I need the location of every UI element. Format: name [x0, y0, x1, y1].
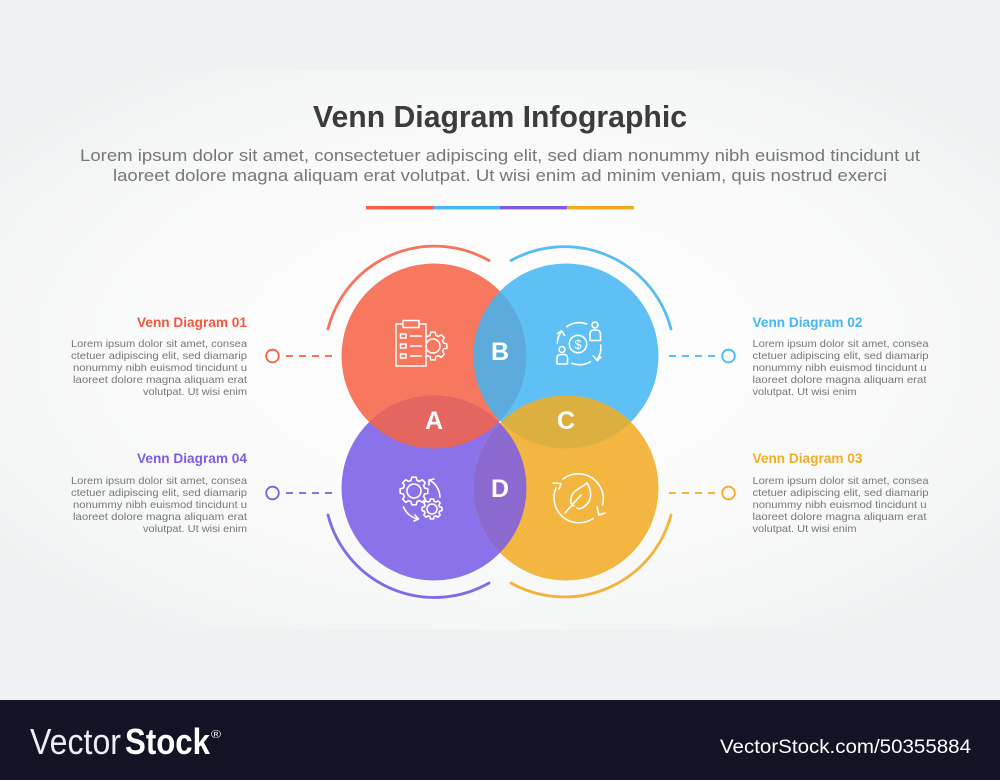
icon: gears with arrows: [400, 477, 442, 521]
text block: Venn Diagram 02: ctetuer adipiscing elit, sed diamarip: [752, 351, 929, 362]
letter C: C: [557, 407, 575, 435]
overlap A: [369, 396, 499, 448]
circle 01 red: [342, 264, 526, 448]
text block: Venn Diagram 03: Lorem ipsum dolor sit amet, consea: [752, 476, 929, 487]
overlap B: [474, 291, 526, 421]
connector 02: [669, 350, 735, 362]
text block: Venn Diagram 01: laoreet dolore magna aliquam erat: [73, 375, 247, 386]
circle 04 purple: [342, 396, 526, 580]
letter B: B: [491, 338, 509, 366]
text block: Venn Diagram 01: Venn Diagram 01: [137, 315, 247, 330]
text block: Venn Diagram 03: nonummy nibh euismod tincidunt u: [752, 500, 927, 511]
text block: Venn Diagram 03: [752, 451, 929, 535]
connector 03: [669, 487, 735, 499]
connector 04: [266, 487, 332, 499]
text block: Venn Diagram 02: laoreet dolore magna aliquam erat: [752, 375, 927, 386]
icon: people exchanging money: [557, 322, 601, 365]
footer logo: [30, 721, 221, 762]
overlap D: [474, 423, 526, 553]
text block: Venn Diagram 03: laoreet dolore magna aliquam erat: [752, 512, 927, 523]
subtitle: [80, 146, 920, 185]
outer arc purple: [328, 515, 489, 597]
footer band: [0, 700, 1000, 780]
icon: clipboard with gear: [396, 320, 447, 366]
text block: Venn Diagram 01: Lorem ipsum dolor sit amet, consea: [71, 339, 247, 350]
connector 01: [266, 350, 332, 362]
text block: Venn Diagram 04: volutpat. Ut wisi enim: [143, 524, 247, 535]
footer logo: Vector: [30, 721, 121, 762]
subtitle: laoreet dolore magna aliquam erat volutpat. Ut wisi enim ad minim veniam, quis nostrud exerci: [113, 166, 887, 185]
text block: Venn Diagram 02: Venn Diagram 02: [752, 315, 862, 330]
text block: Venn Diagram 02: Lorem ipsum dolor sit amet, consea: [752, 339, 929, 350]
circle 02 blue: [474, 264, 658, 448]
text block: Venn Diagram 02: [752, 315, 929, 398]
icon: people exchanging money: $: [574, 337, 582, 352]
text block: Venn Diagram 04: Lorem ipsum dolor sit amet, consea: [71, 476, 247, 487]
overlap C: [501, 396, 631, 448]
text block: Venn Diagram 01: ctetuer adipiscing elit, sed diamarip: [71, 351, 247, 362]
text block: Venn Diagram 04: Venn Diagram 04: [137, 451, 247, 466]
footer logo: ®: [211, 729, 221, 741]
outer arc blue: [511, 247, 671, 329]
text block: Venn Diagram 02: nonummy nibh euismod tincidunt u: [752, 363, 927, 374]
circle 03 yellow: [474, 396, 658, 580]
text block: Venn Diagram 01: [71, 315, 247, 398]
text block: Venn Diagram 03: Venn Diagram 03: [752, 451, 863, 466]
icon: leaf with cycle arrows: [553, 474, 605, 523]
subtitle: Lorem ipsum dolor sit amet, consectetuer adipiscing elit, sed diam nonummy nibh euismod tincidunt ut: [80, 146, 920, 165]
text block: Venn Diagram 01: nonummy nibh euismod tincidunt u: [73, 363, 247, 374]
footer image id: VectorStock.com/50355884: [720, 737, 971, 758]
colour divider bar: [366, 206, 634, 209]
footer logo: Stock: [125, 721, 211, 762]
title: Venn Diagram Infographic: [313, 99, 687, 134]
text block: Venn Diagram 04: nonummy nibh euismod tincidunt u: [73, 500, 247, 511]
letter D: D: [491, 475, 509, 503]
outer arc yellow: [511, 515, 671, 597]
outer arc red: [328, 246, 489, 329]
text block: Venn Diagram 03: ctetuer adipiscing elit, sed diamarip: [752, 488, 929, 499]
text block: Venn Diagram 04: ctetuer adipiscing elit, sed diamarip: [71, 488, 247, 499]
text block: Venn Diagram 03: volutpat. Ut wisi enim: [752, 524, 856, 535]
text block: Venn Diagram 02: volutpat. Ut wisi enim: [752, 387, 856, 398]
letter A: A: [425, 407, 443, 435]
text block: Venn Diagram 04: laoreet dolore magna aliquam erat: [73, 512, 247, 523]
venn diagram: [342, 264, 658, 580]
text block: Venn Diagram 04: [71, 451, 247, 535]
text block: Venn Diagram 01: volutpat. Ut wisi enim: [143, 387, 247, 398]
